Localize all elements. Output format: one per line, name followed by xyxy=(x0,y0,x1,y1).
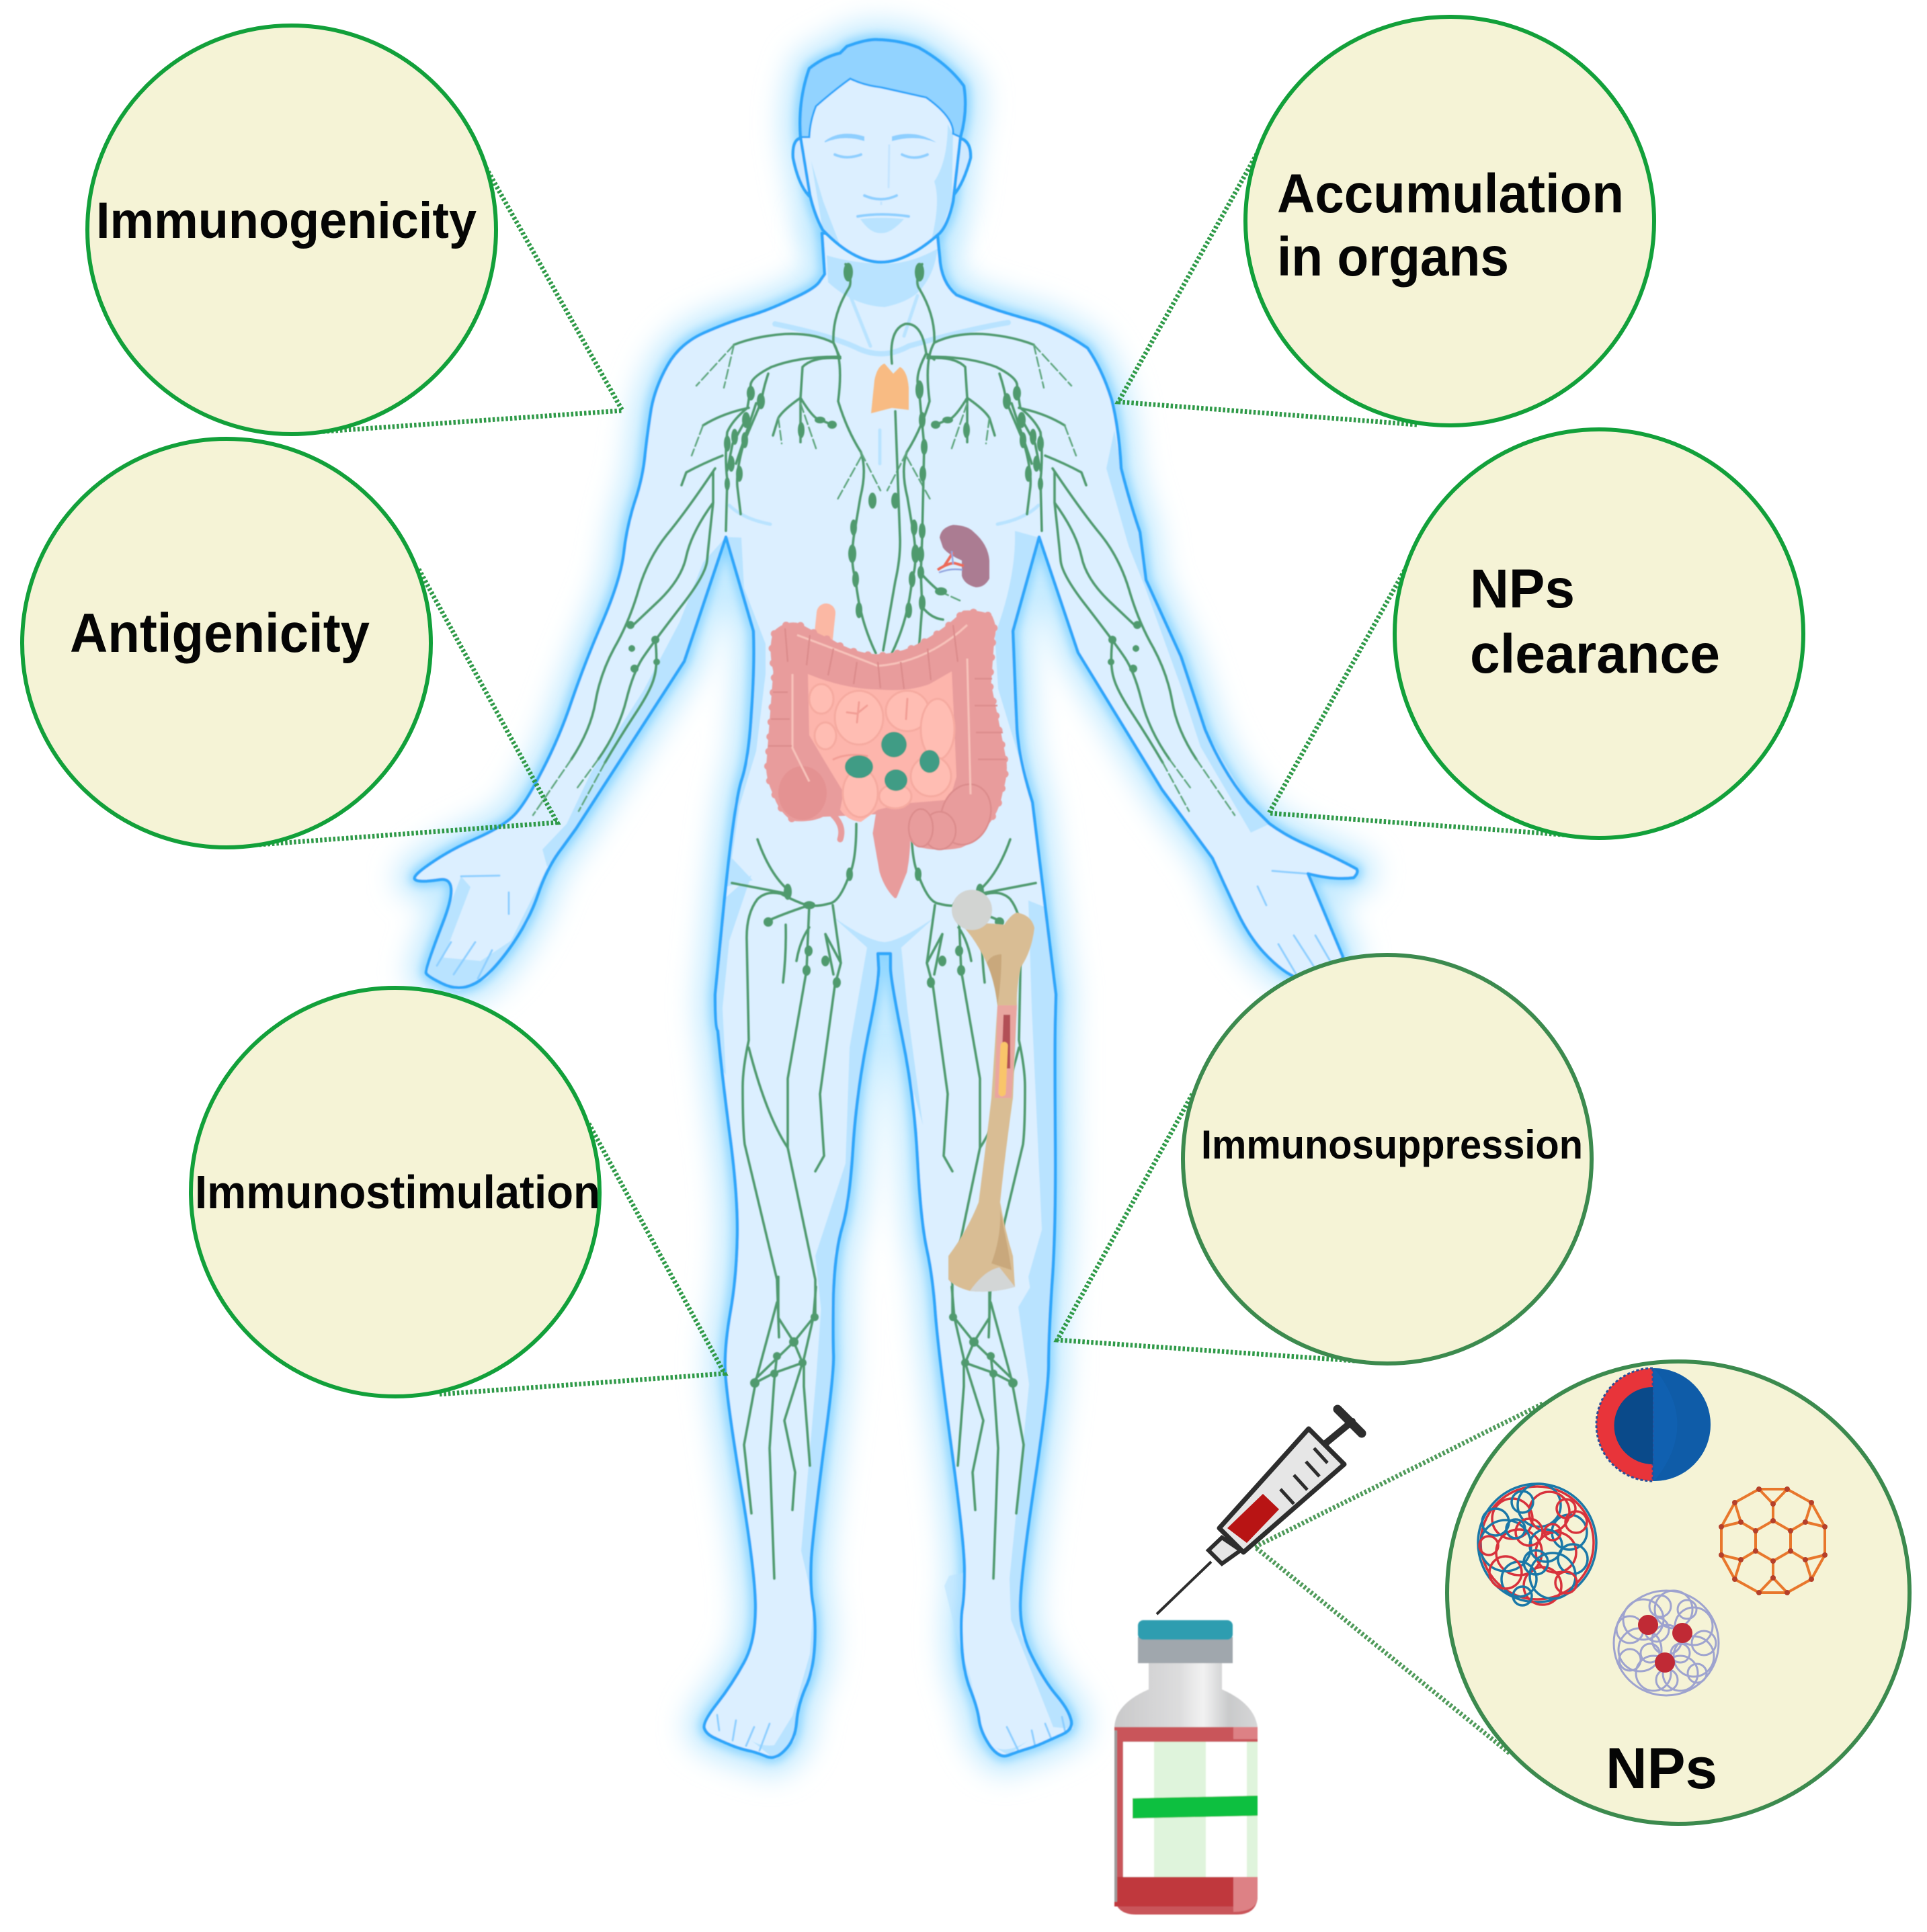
circle: NPs clearance xyxy=(1395,429,1803,838)
icon: vial xyxy=(1114,1620,1258,1915)
vial neck and shoulder xyxy=(1114,1663,1258,1727)
body silhouette xyxy=(415,233,1357,1760)
circle: Immunostimulation xyxy=(191,988,600,1396)
vial body xyxy=(1114,1727,1258,1915)
heading: NPs: NPs xyxy=(1606,1736,1717,1801)
circle: Antigenicity: Antigenicity xyxy=(70,603,370,664)
spleen xyxy=(938,525,989,587)
caecum xyxy=(778,766,827,820)
vial collar xyxy=(1138,1637,1233,1663)
arm vessels xyxy=(571,456,723,763)
large intestine xyxy=(768,612,1006,896)
sigmoid lobes xyxy=(909,777,999,852)
circle: Antigenicity xyxy=(22,439,431,847)
small intestine xyxy=(808,671,956,822)
human figure xyxy=(415,40,1357,1760)
lymph vessels: left half xyxy=(533,263,880,1579)
thymus xyxy=(871,364,909,413)
circle: Immunogenicity xyxy=(87,26,496,434)
icon: fullerene cage xyxy=(1719,1486,1828,1595)
circle: Accumulation in organs xyxy=(1245,17,1654,425)
hair xyxy=(800,40,965,137)
circle: Accumulation in organs: Accumulation xyxy=(1277,163,1624,224)
circle: NPs clearance: clearance xyxy=(1470,624,1720,685)
circle: NPs types xyxy=(1447,1361,1910,1824)
organs xyxy=(768,364,1034,1292)
green nanoparticle deposits xyxy=(845,732,940,791)
callout: dotted guide lines xyxy=(259,154,1571,1753)
circle: Immunogenicity: Immunogenicity xyxy=(96,192,477,249)
circle: Immunosuppression xyxy=(1183,955,1592,1363)
femur bone xyxy=(948,890,1034,1292)
head xyxy=(793,40,971,262)
vial cap xyxy=(1138,1620,1233,1640)
lymph vessels: right half (mirror) xyxy=(887,263,1235,1579)
stomach tube xyxy=(823,613,826,645)
vial label xyxy=(1123,1742,1258,1877)
lymph nodes xyxy=(626,263,876,1388)
body glow xyxy=(415,40,1357,1757)
body shading xyxy=(425,249,1330,1760)
face features xyxy=(825,134,936,233)
icon: polymer micelle with drug cores xyxy=(1614,1591,1719,1695)
icon: liposome sphere xyxy=(1596,1368,1711,1481)
ears xyxy=(793,138,971,200)
icon: syringe xyxy=(1157,1409,1362,1614)
circle: Immunosuppression: Immunosuppression xyxy=(1201,1122,1583,1167)
icon: polymer tangle xyxy=(1478,1484,1596,1605)
circle: NPs clearance: NPs xyxy=(1470,558,1575,620)
appendix xyxy=(827,810,842,839)
circle: Immunostimulation: Immunostimulation xyxy=(195,1166,600,1218)
thoracic duct xyxy=(833,324,962,650)
circle: Accumulation in organs: in organs xyxy=(1277,226,1509,288)
lymphatic system xyxy=(533,263,1235,1579)
